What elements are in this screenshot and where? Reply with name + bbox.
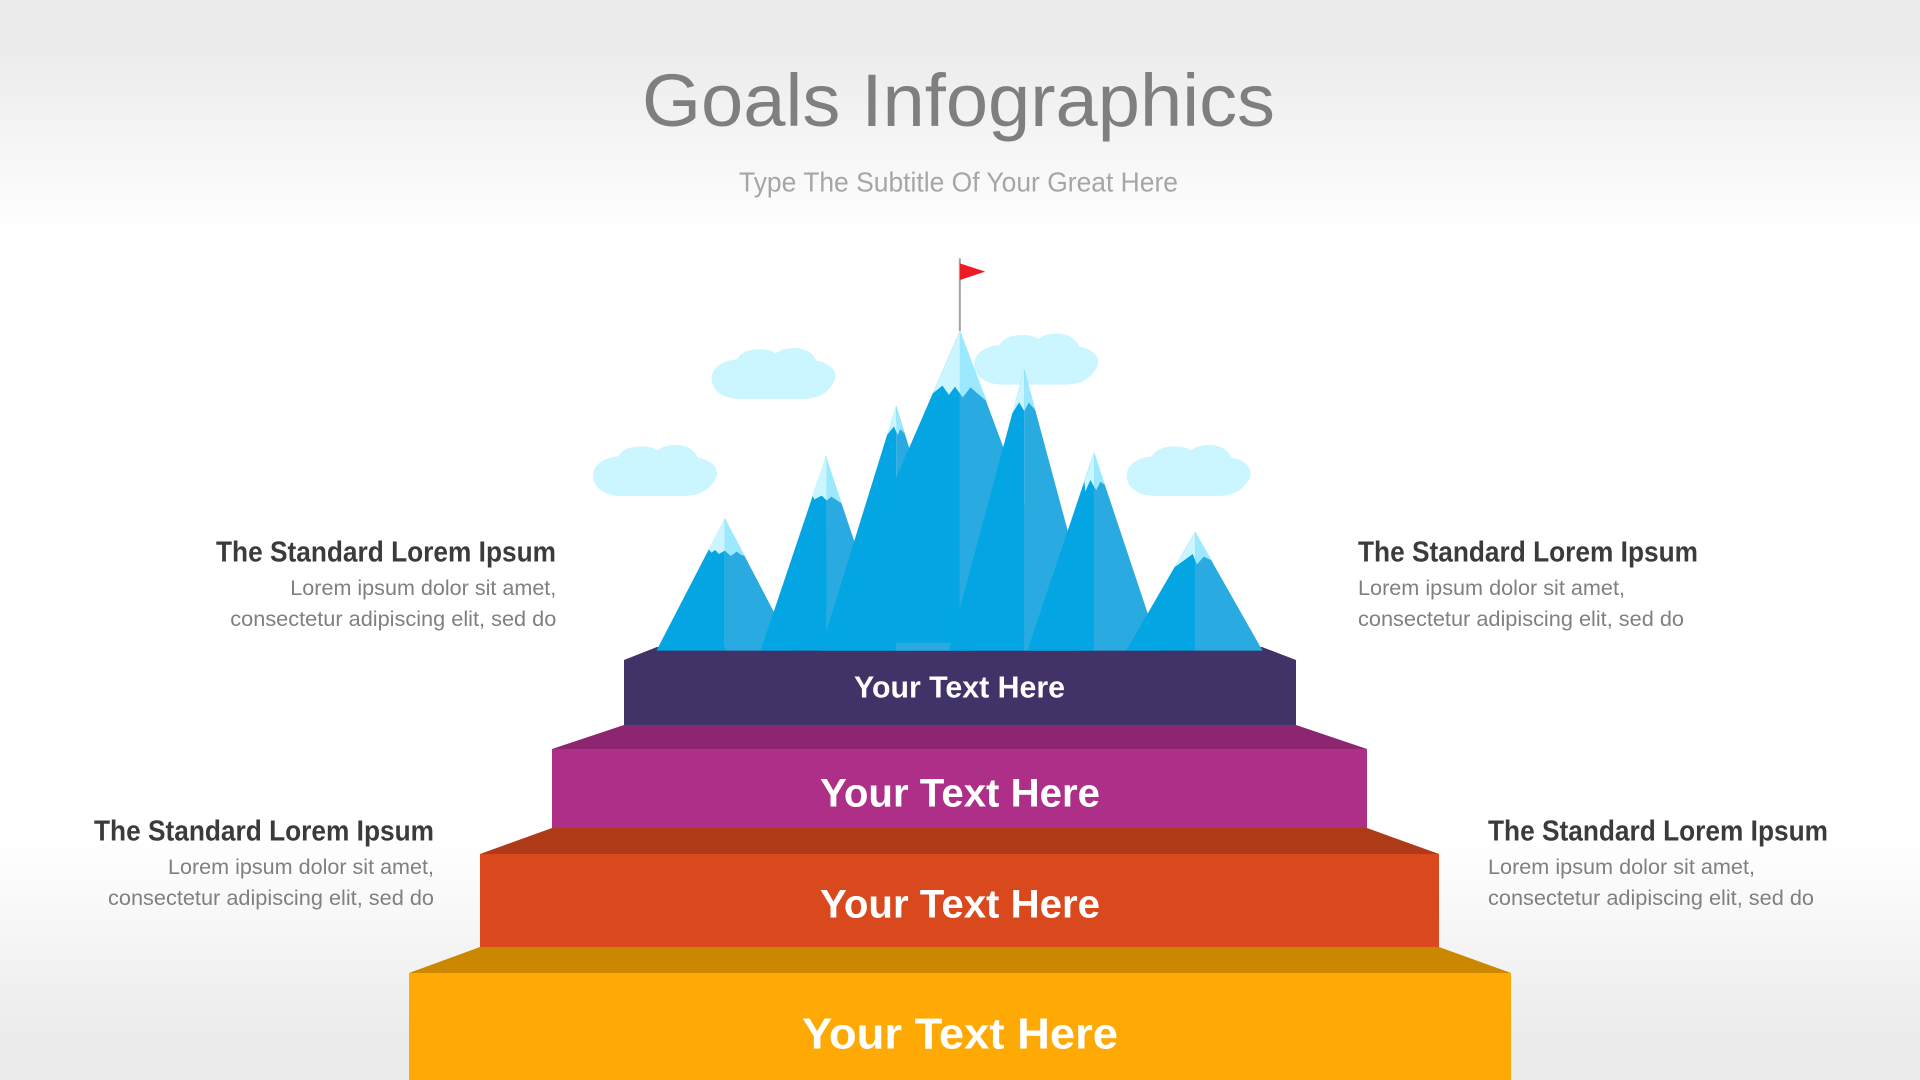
text block: upper left: Lorem ipsum dolor sit amet, xyxy=(290,577,556,600)
mountain illustration xyxy=(593,258,1263,651)
step 3: orange xyxy=(480,828,1439,947)
text block: upper right: The Standard Lorem Ipsum xyxy=(1358,537,1698,569)
text block: upper left: consectetur adipiscing elit, sed do xyxy=(230,608,556,631)
text block: lower left xyxy=(94,816,434,910)
step 2: magenta xyxy=(552,725,1367,828)
icon: cloud far left xyxy=(593,445,717,496)
icon: cloud upper left xyxy=(712,348,836,399)
text block: upper left: The Standard Lorem Ipsum xyxy=(216,537,556,569)
step 1: purple xyxy=(624,647,1296,725)
step 4: yellow base xyxy=(409,947,1511,1080)
text block: upper left xyxy=(216,537,556,631)
mountain 3 xyxy=(820,406,972,651)
icon: cloud upper right xyxy=(974,334,1098,385)
text block: lower right xyxy=(1488,816,1828,910)
mountain 6 xyxy=(1027,452,1160,651)
title: Goals Infographics xyxy=(642,59,1275,142)
text block: upper right xyxy=(1358,537,1698,631)
icon: cloud far right xyxy=(1127,445,1251,496)
text block: lower right: The Standard Lorem Ipsum xyxy=(1488,816,1828,848)
text block: lower left: Lorem ipsum dolor sit amet, xyxy=(168,856,434,879)
mountain 5 xyxy=(948,369,1100,651)
text block: upper right: consectetur adipiscing elit, sed do xyxy=(1358,608,1684,631)
mountain 1 xyxy=(656,518,794,651)
text block: lower left: consectetur adipiscing elit, sed do xyxy=(108,887,434,910)
text block: lower right: consectetur adipiscing elit, sed do xyxy=(1488,887,1814,910)
step 1: purple: Your Text Here xyxy=(854,670,1065,705)
subtitle: Type The Subtitle Of Your Great Here xyxy=(739,166,1178,198)
mountain 4: summit xyxy=(821,331,1079,651)
text block: lower right: Lorem ipsum dolor sit amet, xyxy=(1488,856,1755,879)
step 2: magenta: Your Text Here xyxy=(820,772,1100,816)
step 4: yellow base: Your Text Here xyxy=(802,1010,1118,1058)
text block: lower left: The Standard Lorem Ipsum xyxy=(94,816,434,848)
icon: flag xyxy=(959,258,985,331)
text block: upper right: Lorem ipsum dolor sit amet, xyxy=(1358,577,1625,600)
step 3: orange: Your Text Here xyxy=(820,882,1100,926)
mountain 7 xyxy=(1126,532,1263,651)
mountain 2 xyxy=(761,457,891,651)
